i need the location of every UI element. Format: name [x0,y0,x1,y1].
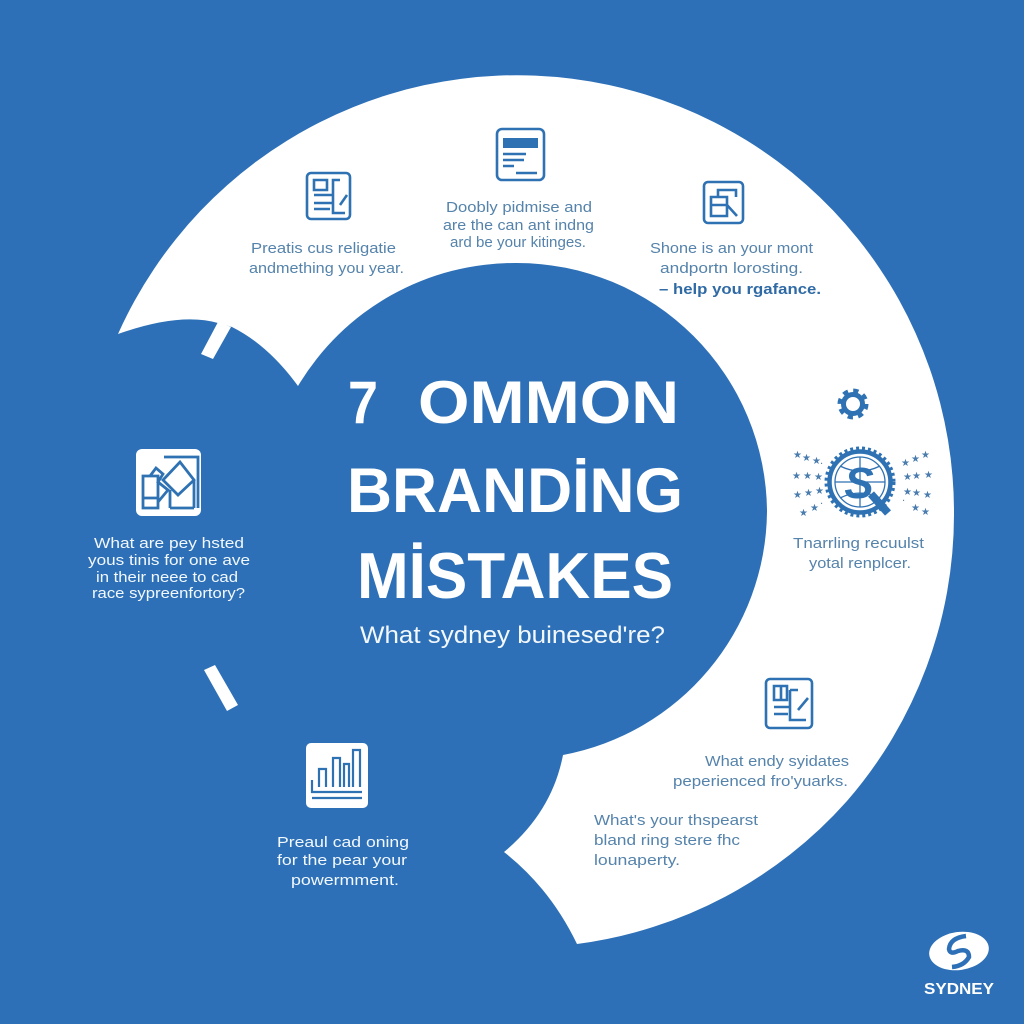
title: 7 [348,369,378,436]
logo: Sydney [924,928,994,998]
title [347,369,683,612]
icon: badge with magnifier and stars: ★★★·★★★★★★★★· [792,450,824,519]
text: top centre: ard be your kitinges. [450,235,586,251]
text: bottom left: for the pear your [277,852,407,869]
logo: Sydney: SYDNEY [924,981,994,998]
icon: bar chart [306,743,368,808]
title: MİSTAKES [357,539,673,612]
text: left [88,536,250,602]
icon: gear [840,390,866,418]
text: bottom left: powermment. [291,872,399,889]
tick mark: upper [201,322,231,359]
title: BRANDİNG [347,456,683,526]
text: bottom right upper: What endy syidates [705,753,849,770]
title: OMMON [418,369,679,436]
text: right: yotal renplcer. [809,555,911,572]
icon: top right tool [704,182,743,223]
text: top right: – help you rgafance. [659,281,821,298]
text: top right [650,240,821,298]
icon: top left document [307,173,350,219]
icon: badge with magnifier and stars: S [844,459,874,508]
text: bottom left [277,834,409,889]
text: top left: andmething you year. [249,260,404,277]
icon: bottom right document [766,679,812,728]
text: left: in their neee to cad [96,570,238,586]
icon: badge with magnifier and stars: ★★★★★★★★★·★★ [901,450,933,518]
text: top left [249,240,404,277]
text: bottom right lower: lounaperty. [594,852,680,869]
text: top right: andportn lorosting. [660,260,803,277]
text: top centre: are the can ant indng [443,218,594,234]
text: right: Tnarrling recuulst [793,535,925,552]
icon: badge with magnifier and stars [792,448,933,519]
text: top centre [443,200,594,251]
text: top centre: Doobly pidmise and [446,200,592,216]
text: bottom right lower: bland ring stere fhc [594,832,741,849]
text: bottom right lower: What's your thspearst [594,812,759,829]
tick mark: lower [204,665,238,711]
icon: top centre document [497,129,544,180]
text: right [793,535,925,572]
text: bottom right upper [673,753,849,790]
text: top left: Preatis cus religatie [251,240,396,257]
panel: white ring [118,75,954,944]
text: bottom right upper: peperienced fro'yuarks. [673,773,848,790]
text: top right: Shone is an your mont [650,240,814,257]
text: bottom right lower [594,812,759,869]
subtitle: What sydney buinesed're? [360,622,665,649]
text: left: race sypreenfortory? [92,586,245,602]
text: bottom left: Preaul cad oning [277,834,409,851]
text: left: What are pey hsted [94,536,244,552]
text: left: yous tinis for one ave [88,553,250,569]
icon: left house [136,449,201,516]
